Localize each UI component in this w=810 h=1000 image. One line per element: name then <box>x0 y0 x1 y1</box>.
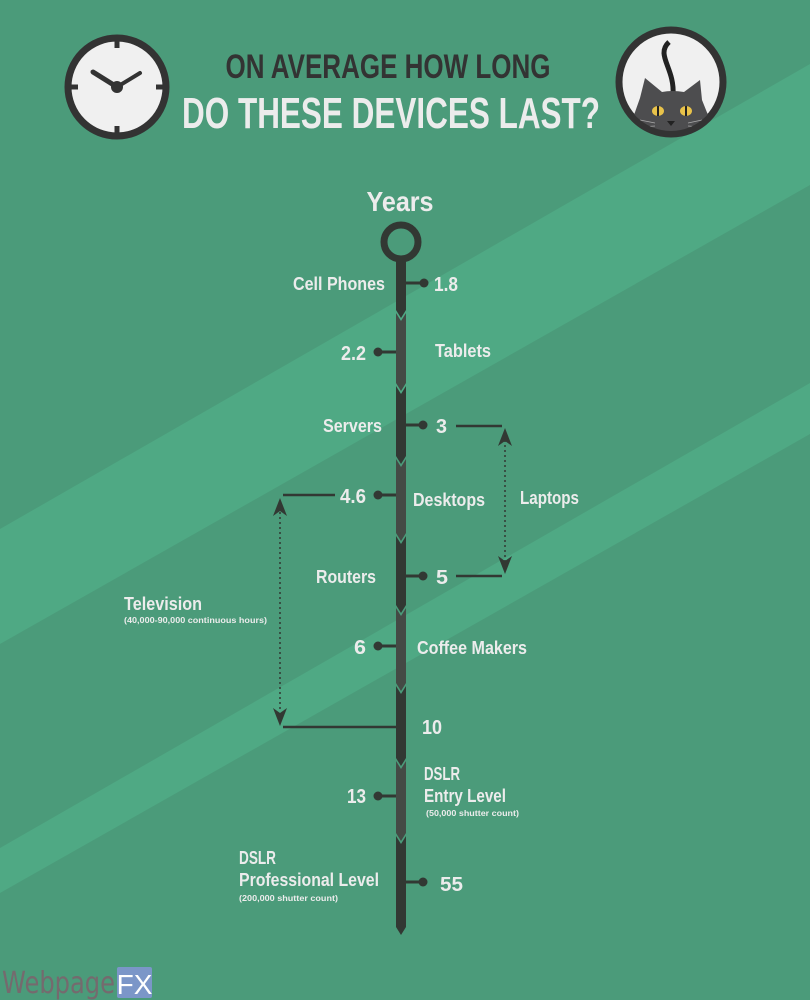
item: DSLR professional: (200,000 shutter count) <box>239 894 338 903</box>
logo: WebpageFX: Webpage <box>2 966 115 1000</box>
item: routers <box>316 567 448 589</box>
item: tablets <box>341 341 491 365</box>
item: routers: Routers <box>316 567 376 587</box>
logo: WebpageFX: FX <box>117 969 153 1000</box>
item: cell phones: 1.8 <box>434 274 458 296</box>
heading: years: Years <box>366 186 434 217</box>
item: DSLR professional: DSLR <box>239 848 276 868</box>
bracket: laptops <box>456 426 579 576</box>
item: DSLR entry <box>347 764 519 818</box>
bracket: television <box>124 495 396 727</box>
title: DO THESE DEVICES LAST? <box>182 89 600 138</box>
item: DSLR entry: Entry Level <box>424 786 506 806</box>
item: DSLR entry: DSLR <box>424 764 460 784</box>
bracket: laptops: Laptops <box>520 488 579 508</box>
item: routers: 5 <box>436 567 448 589</box>
item: DSLR professional: Professional Level <box>239 870 379 890</box>
item: servers <box>323 416 447 438</box>
item: cell phones: Cell Phones <box>293 274 385 294</box>
item: DSLR professional: 55 <box>440 874 463 896</box>
item: servers: 3 <box>436 416 447 438</box>
item: tablets: 2.2 <box>341 343 366 365</box>
item: DSLR professional <box>239 848 463 903</box>
item: coffee makers: Coffee Makers <box>417 638 527 658</box>
item: desktops: Desktops <box>413 490 485 510</box>
bracket: television: Television <box>124 594 202 614</box>
icon: clock <box>68 38 166 136</box>
item: 10: 10 <box>422 717 442 739</box>
icon: cat <box>612 30 730 145</box>
item: tablets: Tablets <box>435 341 491 361</box>
item: DSLR entry: 13 <box>347 786 366 808</box>
timeline spine <box>384 225 418 935</box>
title: ON AVERAGE HOW LONG <box>226 48 550 86</box>
item: coffee makers <box>354 637 527 659</box>
item: desktops: 4.6 <box>340 486 366 508</box>
item: desktops <box>340 486 485 510</box>
bracket: television: (40,000-90,000 continuous hours) <box>124 616 267 625</box>
item: coffee makers: 6 <box>354 637 366 659</box>
title <box>182 48 600 138</box>
item: DSLR entry: (50,000 shutter count) <box>426 809 519 818</box>
item: servers: Servers <box>323 416 382 436</box>
item: cell phones <box>293 274 458 296</box>
